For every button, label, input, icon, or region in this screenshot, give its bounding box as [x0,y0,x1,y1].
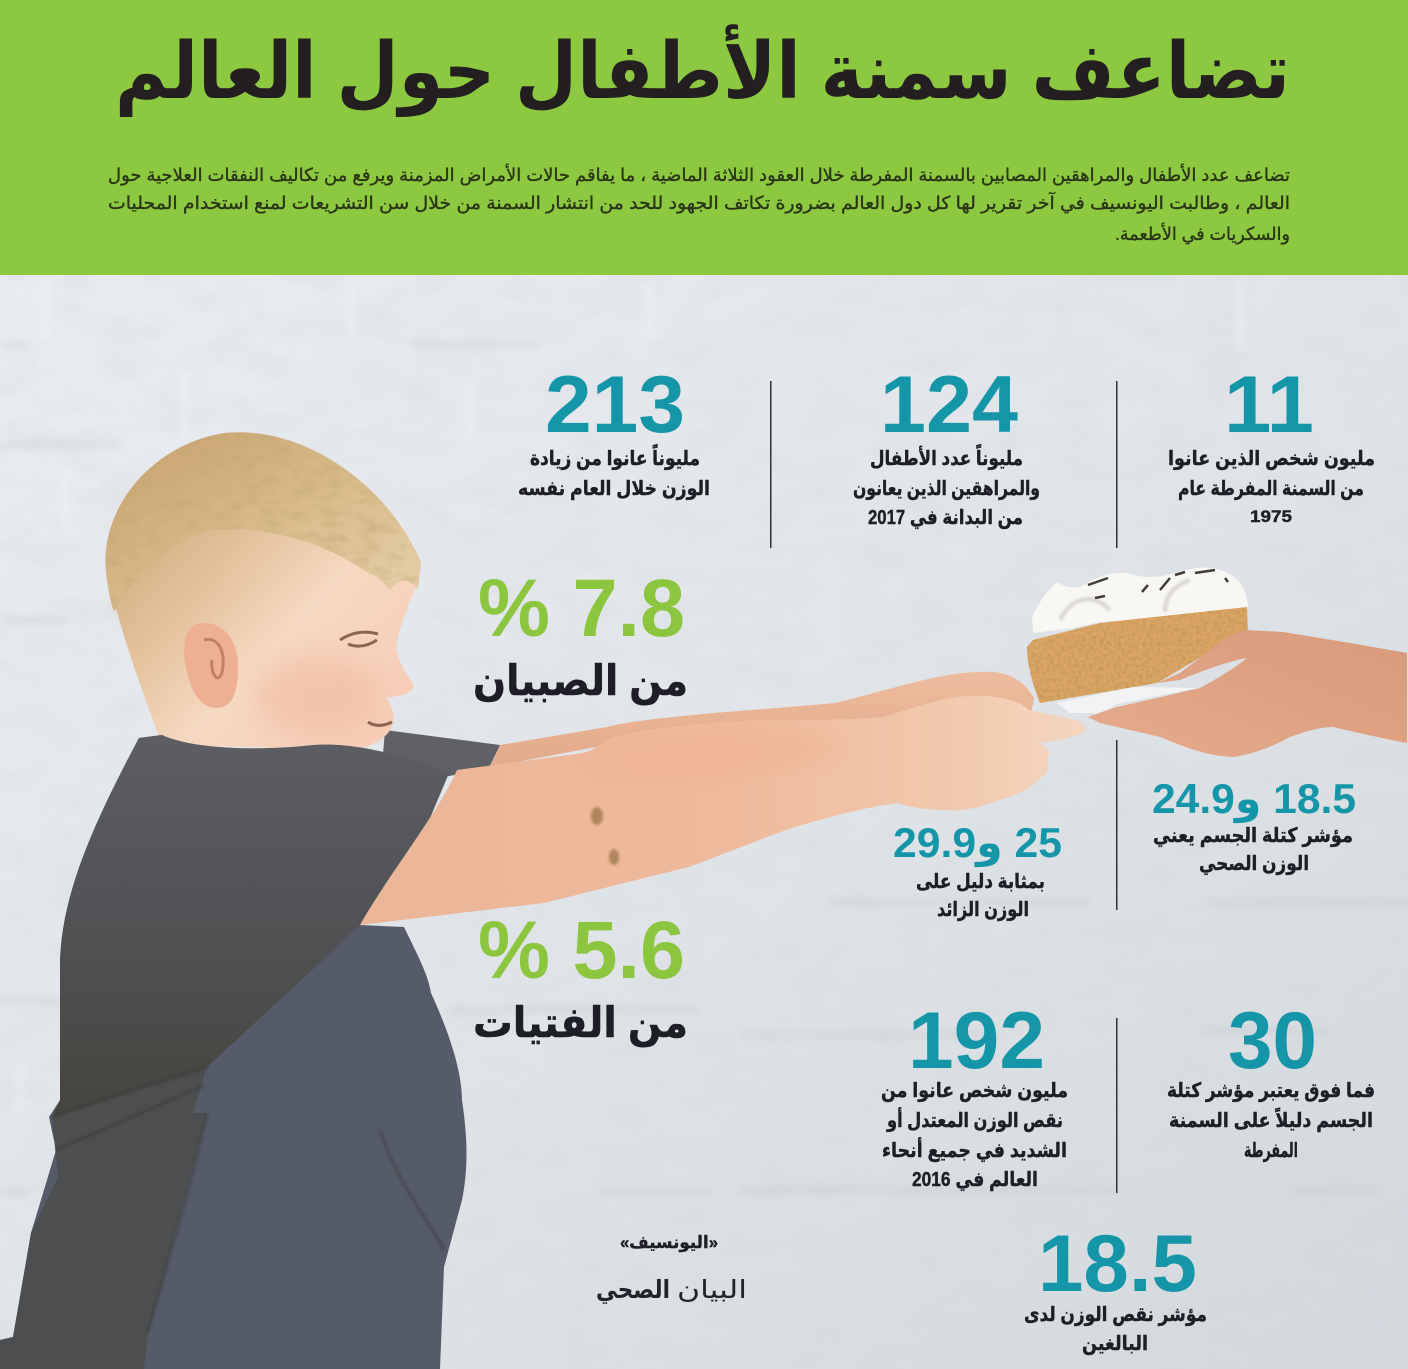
stat: 11 [1168,360,1375,526]
fold lines [52,1067,444,1333]
stat: 11: من السمنة المفرطة عام [1178,478,1364,500]
stat: 124: من البدانة في 2017 [868,507,1023,530]
stat: 192 [881,996,1068,1192]
eye and mouth [340,632,392,725]
stat: 11: مليون شخص الذين عانوا [1168,448,1375,470]
cream shading [1060,580,1190,620]
illustration: boy pushing away plate of cake [0,432,1407,1369]
shirt upper dark part [52,735,449,1117]
stat: 192: مليون شخص عانوا من [881,1080,1068,1102]
stat: 192: العالم في 2016 [912,1169,1038,1192]
stat: 192: 192 [908,996,1045,1086]
stat: BMI overweight: 25 و29.9 [893,819,1062,868]
plate [1057,687,1197,717]
adult hand and forearm [1088,630,1407,757]
intro paragraph: والسكريات في الأطعمة. [1115,223,1290,245]
ear inner [204,639,223,678]
stat: BMI healthy [1152,775,1356,876]
stat: girls 5.6%: من الفتيات [473,999,688,1048]
photo background: white brick wall [0,275,1408,1369]
stat: BMI overweight: الوزن الزائد [937,899,1029,921]
hair [106,432,421,612]
ear [184,623,238,708]
stat: 18.5: مؤشر نقص الوزن لدى [1024,1304,1207,1326]
shirt lower folds [0,1067,207,1369]
logo: Al Bayan health: البيان [677,1276,747,1304]
stat: boys 7.8% [473,563,688,706]
stat: BMI healthy: 18.5 و24.9 [1152,775,1356,824]
header band [0,0,1408,275]
divider [1116,1018,1118,1193]
stat: 124 [853,360,1040,530]
stat: 192: نقص الوزن المعتدل أو [886,1106,1063,1132]
stat: BMI overweight: بمثابة دليل على [916,871,1045,893]
stat: 124: 124 [880,360,1018,450]
stat: 213: الوزن خلال العام نفسه [518,478,710,500]
stat: 192: الشديد في جميع أنحاء [882,1136,1067,1163]
near arm and hand [360,696,1085,925]
stat: 30: فما فوق يعتبر مؤشر كتلة [1167,1080,1375,1102]
stat: 18.5: البالغين [1082,1333,1148,1355]
elbow creases [591,807,619,865]
intro paragraph: تضاعف عدد الأطفال والمراهقين المصابين بالسمنة المفرطة خلال العقود الثلاثة الماضية ، ما يفاقم حالات الأمراض المزمنة ويرفع من تكاليف النفقات العلاجية حول [108,164,1290,186]
stat: 213: 213 [545,360,685,450]
stat: girls 5.6% [473,905,688,1048]
stat: 30: المفرطة [1244,1140,1298,1162]
stat: 30: الجسم دليلاً على السمنة [1169,1107,1373,1132]
cake sprinkles [1088,570,1228,598]
stat: girls 5.6%: % 5.6 [478,905,685,996]
far arm [490,672,1034,767]
stat: 213 [518,360,710,500]
intro paragraph [108,164,1290,245]
logo: Al Bayan health [596,1276,747,1304]
cake cream [1032,567,1248,633]
boy head [106,518,420,750]
stat: 18.5 [1024,1219,1207,1355]
stat: 18.5: 18.5 [1038,1219,1197,1309]
far sleeve [380,730,500,790]
cake sponge [1027,607,1248,703]
stat: 30: 30 [1228,996,1317,1086]
intro paragraph: العالم ، وطالبت اليونسيف في آخر تقرير لها كل دول العالم بضرورة تكاتف الجهود للحد من انتشار السمنة من خلال سن التشريعات لمنع استخدام المحليات [108,191,1290,214]
stat: 124: مليوناً عدد الأطفال [870,444,1023,470]
vertical divider below hand [1116,740,1118,910]
stat: 30 [1167,996,1375,1162]
divider [770,381,772,548]
cheek [253,655,377,735]
stat: BMI healthy: الوزن الصحي [1199,853,1309,876]
boy shirt [0,735,466,1369]
stat: 11: 1975 [1250,507,1292,526]
stat: boys 7.8%: % 7.8 [478,563,685,654]
stat: boys 7.8%: من الصبيان [473,657,688,706]
stat: BMI healthy: مؤشر كتلة الجسم يعني [1153,825,1353,848]
stat: BMI overweight [893,819,1062,921]
source: «اليونسيف» [620,1233,718,1253]
stat: 213: مليوناً عانوا من زيادة [530,444,700,470]
stat: 11: 11 [1224,360,1314,450]
stat: 124: والمراهقين الذين يعانون [853,478,1040,500]
title: تضاعف سمنة الأطفال حول العالم [115,25,1290,117]
logo: Al Bayan health: الصحي [596,1276,670,1304]
arm redness [589,728,851,782]
divider [1116,381,1118,548]
